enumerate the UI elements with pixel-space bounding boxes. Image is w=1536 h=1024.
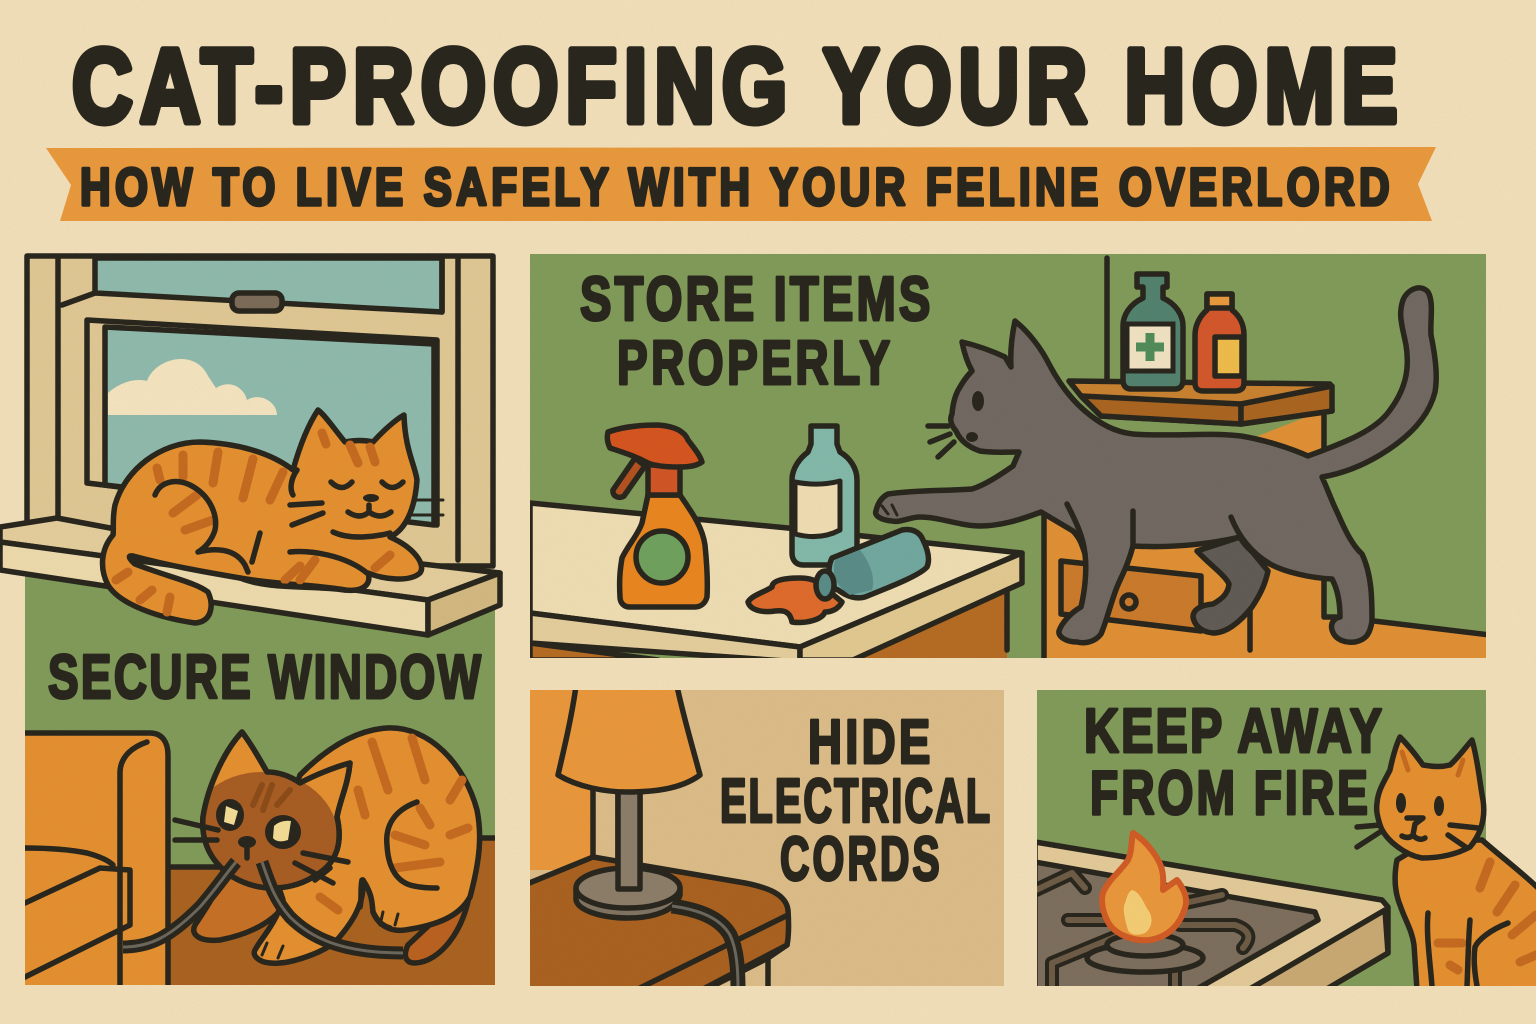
panel: hide electrical cords	[527, 686, 1004, 990]
heading: FROM FIRE	[1090, 758, 1368, 828]
heading: KEEP AWAY	[1084, 696, 1382, 765]
heading: STORE ITEMS	[580, 264, 930, 334]
sleeping orange cat	[103, 410, 443, 623]
heading: PROPERLY	[617, 328, 890, 398]
window sill	[0, 518, 500, 635]
lamp	[558, 686, 700, 918]
sofa	[20, 733, 168, 990]
grey cat	[876, 288, 1436, 643]
heading	[1086, 708, 1382, 816]
side table	[527, 857, 789, 990]
shelf bottles	[1123, 274, 1244, 391]
orange cat	[1357, 737, 1536, 990]
flame	[1102, 833, 1186, 940]
text: CORDS	[780, 825, 940, 894]
cord-chewing scene	[20, 728, 495, 990]
text	[722, 718, 990, 882]
text: HIDE	[808, 707, 930, 777]
cord	[672, 906, 738, 990]
black electrical cord	[123, 862, 403, 953]
heading: SECURE WINDOW	[48, 642, 481, 712]
table	[530, 503, 1022, 662]
puddle	[748, 578, 842, 623]
panel: store items	[530, 254, 1490, 662]
spilled bottle	[816, 529, 928, 599]
stove	[1035, 842, 1388, 990]
floor and cabinet	[1044, 258, 1490, 660]
title: CAT-PROOFING YOUR HOME	[72, 28, 1398, 145]
panel: secure window	[0, 256, 500, 990]
subtitle ribbon: HOW TO LIVE SAFELY WITH YOUR FELINE OVERLORD	[80, 159, 1390, 217]
window frame	[27, 256, 493, 566]
panel: keep away from fire	[1035, 690, 1536, 990]
upright bottle	[792, 426, 857, 565]
spray bottle	[607, 425, 707, 607]
tabby cat chewing cord	[175, 728, 480, 963]
text: ELECTRICAL	[720, 767, 990, 836]
heading	[580, 275, 930, 386]
